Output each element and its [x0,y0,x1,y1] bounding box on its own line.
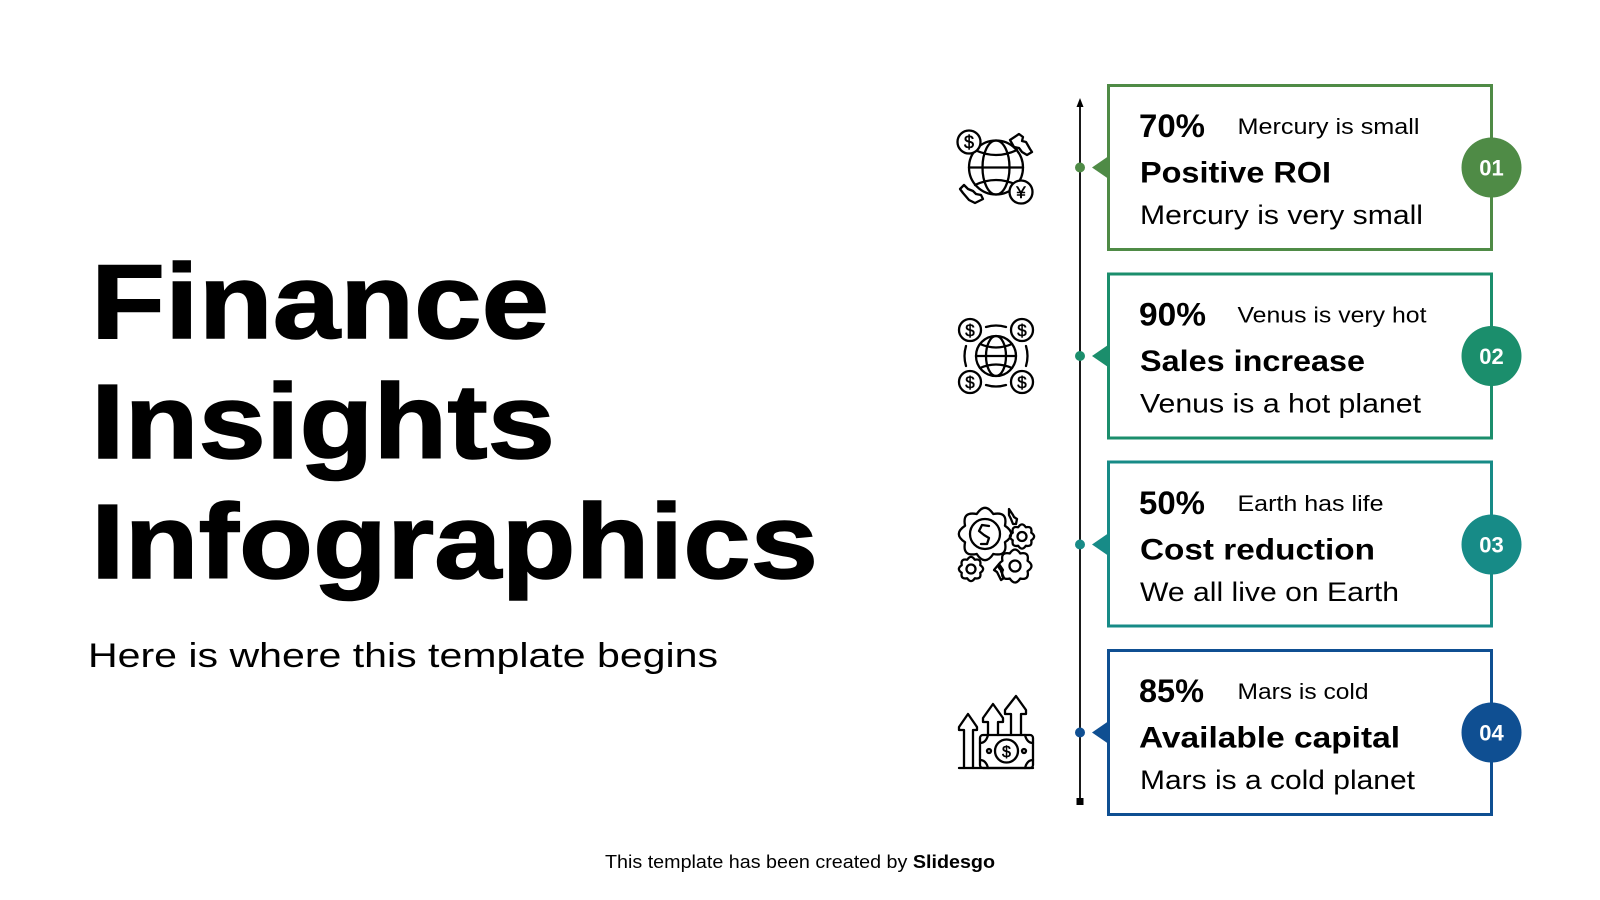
card 4: Available capital: Mars is a cold planet [1140,765,1416,795]
title: Finance [91,243,549,361]
card 3: Cost reduction: 03 [1479,532,1504,558]
card 2: Sales increase: 90% [1139,296,1206,332]
card 4: Available capital: Mars is cold [1238,679,1368,704]
card 3: Cost reduction: Cost reduction [1140,534,1375,566]
icon: globe with four dollar coins: $ [965,321,975,340]
card 3: Cost reduction [1092,462,1522,626]
card 2: Sales increase: Venus is a hot planet [1140,388,1422,418]
card 2: Sales increase: Sales increase [1140,345,1365,378]
title [91,243,818,601]
card 2: Sales increase [1092,274,1522,438]
card 4: Available capital: 85% [1139,673,1204,709]
dot 4 [1075,728,1085,738]
dot 2 [1075,351,1085,361]
title: Insights [91,363,555,481]
footer credit: This template has been created by Slidesgo [605,852,995,872]
card 1: Positive ROI: Mercury is small [1238,114,1420,139]
dot 1 [1075,162,1085,172]
card 1: Positive ROI: Positive ROI [1140,156,1331,190]
card 1: Positive ROI: 01 [1479,156,1504,180]
icon: globe with four dollar coins: $ [1017,321,1027,340]
timeline axis with arrow [1076,98,1084,805]
card 1: Positive ROI [1092,86,1522,250]
icon: globe with currency exchange [958,130,1032,204]
card 4: Available capital [1092,650,1522,814]
card 3: Cost reduction: We all live on Earth [1140,577,1399,607]
card 4: Available capital: 04 [1479,720,1504,746]
icon: globe with four dollar coins [959,319,1033,393]
card 2: Sales increase: Venus is very hot [1238,302,1426,328]
icon: rising arrows and banknote: $ [1002,744,1011,761]
title: Infographics [91,483,818,601]
card 4: Available capital: Available capital [1139,722,1400,754]
card 2: Sales increase: 02 [1479,344,1504,369]
subtitle: Here is where this template begins [88,637,718,675]
card 3: Cost reduction: 50% [1139,485,1205,521]
icon: globe with currency exchange: ¥ [1015,183,1026,202]
icon: rising arrows and banknote [959,696,1033,768]
icon: globe with four dollar coins: $ [965,373,975,392]
icon: gears with exchange arrows [959,508,1034,582]
card 3: Cost reduction: Earth has life [1238,491,1384,516]
card 1: Positive ROI: 70% [1139,108,1205,144]
icon: globe with currency exchange: $ [964,132,974,152]
dot 3 [1075,540,1085,550]
icon: globe with four dollar coins: $ [1017,373,1027,392]
card 1: Positive ROI: Mercury is very small [1140,200,1423,230]
